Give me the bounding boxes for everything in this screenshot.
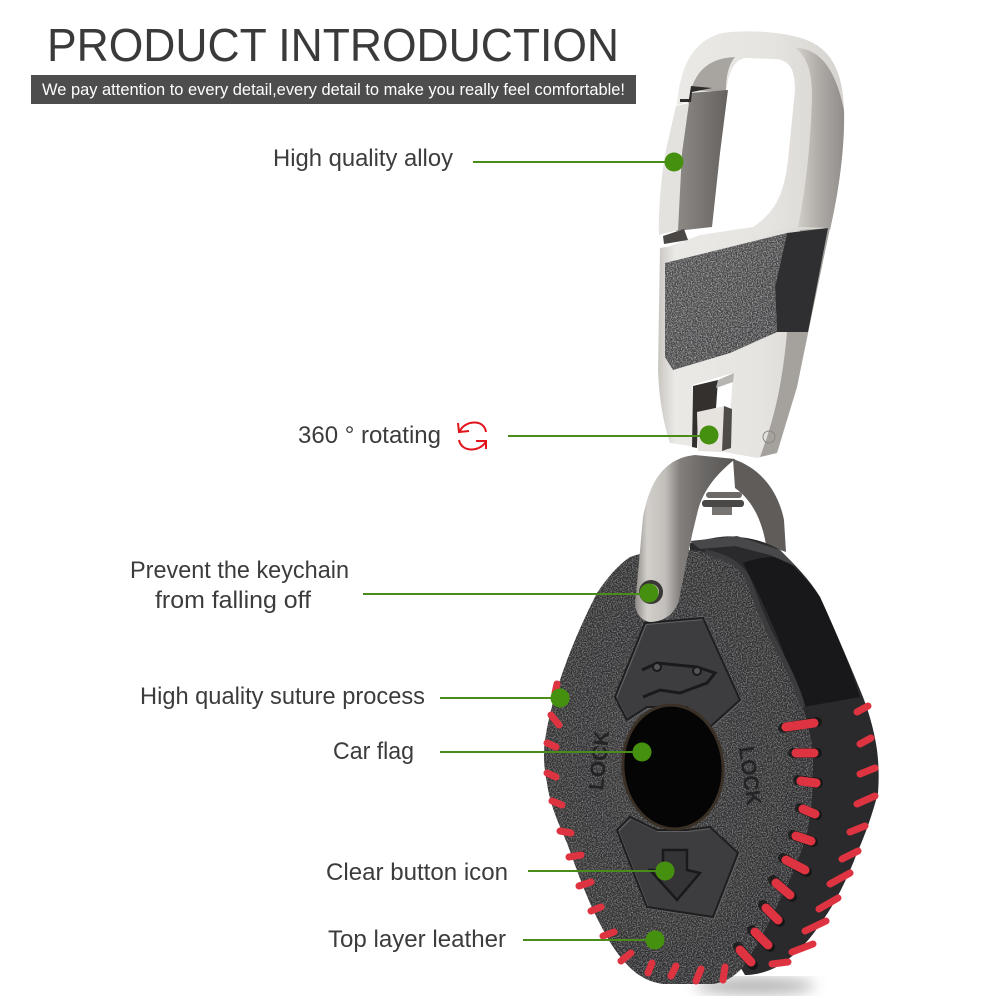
leather inlay: [665, 233, 787, 370]
label: high quality suture process: High quality suture process: [140, 683, 425, 710]
product: carabiner keychain: [658, 31, 844, 458]
back and side panel: [690, 536, 879, 975]
swivel opening: [692, 373, 733, 450]
label: high quality suture process: [140, 683, 570, 710]
subtitle banner: We pay attention to every detail,every detail to make you really feel comfortable!: [42, 80, 625, 99]
carabiner arch and right band: [660, 31, 844, 250]
product shadow: [695, 978, 815, 994]
front shell: [544, 549, 813, 984]
product: shackle back arm: [733, 459, 786, 552]
label: prevent the keychain from falling off: [130, 557, 658, 614]
label: clear button icon: Clear button icon: [326, 859, 508, 886]
carabiner gate: [676, 90, 728, 231]
upper button with trunk icon: [615, 618, 741, 728]
label: top layer leather: Top layer leather: [328, 926, 506, 953]
subtitle banner: [31, 75, 636, 104]
car flag opening: [618, 701, 728, 833]
label: prevent the keychain from falling off: Prevent the keychain: [130, 557, 349, 584]
icon: rotate arrows: [458, 422, 486, 450]
product: leather key fob: LOCK: [585, 730, 614, 791]
label: prevent the keychain from falling off: from falling off: [155, 587, 311, 614]
label: car flag: [333, 738, 652, 765]
label: high quality alloy: [273, 145, 684, 172]
lock labels: LOCK: [734, 745, 765, 807]
label: clear button icon: [326, 859, 674, 886]
label: high quality alloy: High quality alloy: [273, 145, 453, 172]
label: top layer leather: [328, 926, 664, 953]
stitching: [738, 722, 818, 965]
screw: [702, 492, 744, 515]
label: 360 rotating: 360 ° rotating: [298, 422, 441, 449]
lower button with arrow icon: [617, 817, 739, 918]
carabiner body: [658, 227, 830, 458]
title: PRODUCT INTRODUCTION: [47, 19, 619, 71]
product: leather key fob: [544, 536, 879, 984]
rivet: [763, 431, 775, 443]
label: 360 rotating: [298, 422, 718, 449]
label: car flag: Car flag: [333, 738, 414, 765]
product: shackle front arm: [635, 455, 735, 622]
